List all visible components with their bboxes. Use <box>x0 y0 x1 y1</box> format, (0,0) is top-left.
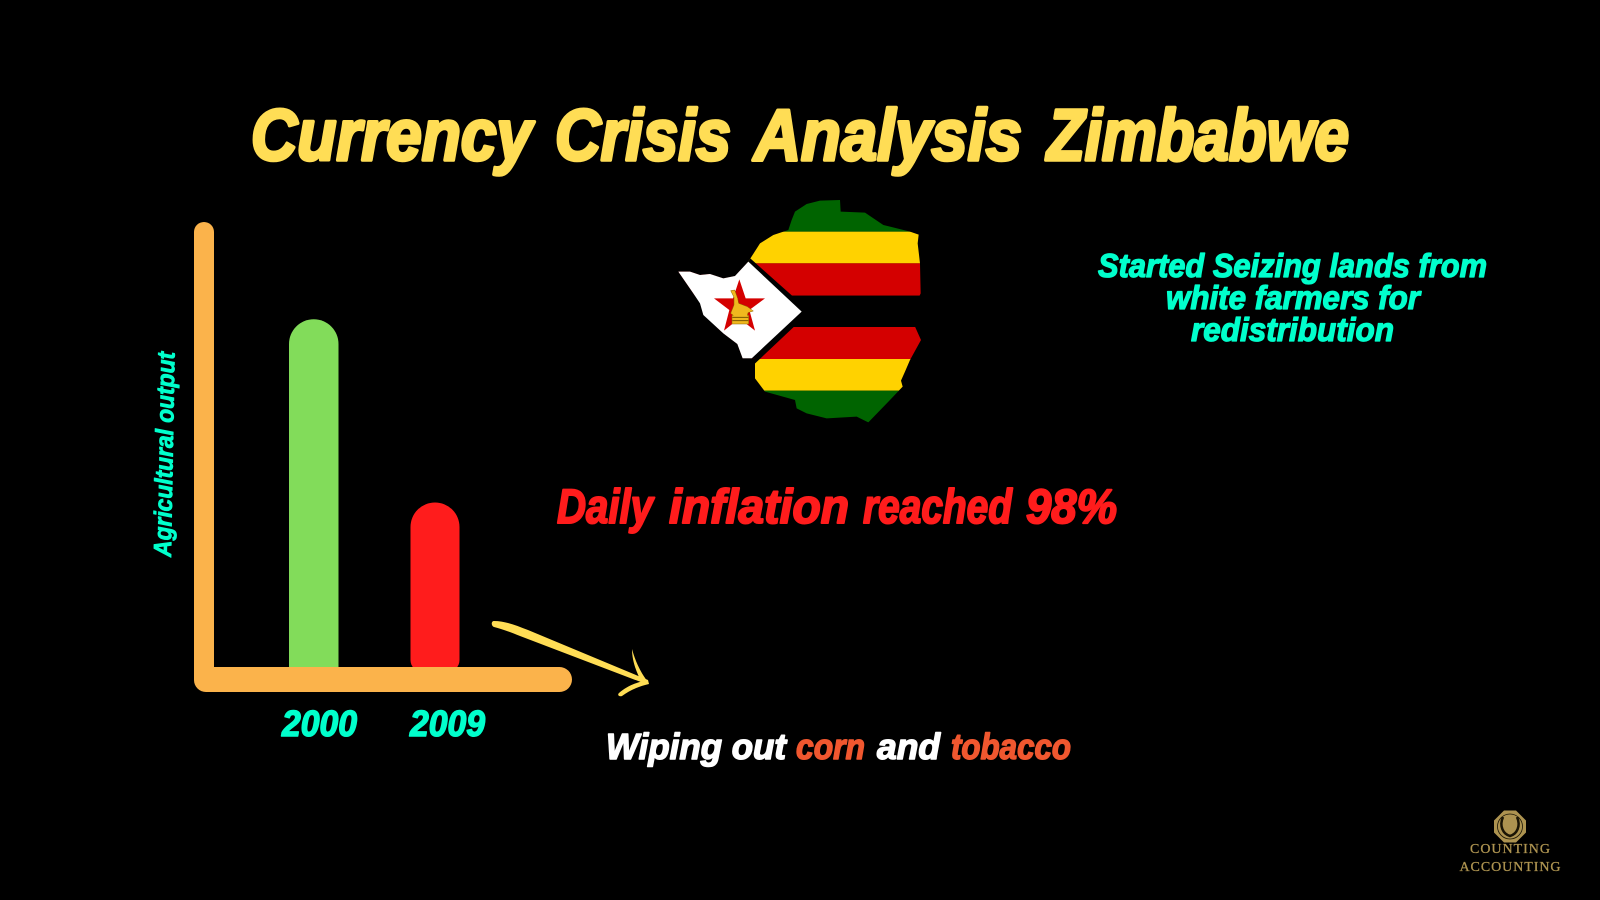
title: Analysis <box>752 96 1022 176</box>
text: land seizure note: white farmers for <box>1166 279 1422 316</box>
text: wiping out corn and tobacco: tobacco <box>951 726 1071 767</box>
text: daily inflation callout: Daily <box>557 481 655 534</box>
text: daily inflation callout: inflation <box>669 481 849 534</box>
y axis label: Agricultural output <box>149 350 181 558</box>
icon: Zimbabwe flag map <box>678 200 921 422</box>
logo wordmark <box>1460 842 1560 875</box>
text: daily inflation callout <box>557 481 1117 534</box>
chart axes <box>194 222 572 692</box>
text: daily inflation callout: reached <box>863 481 1013 534</box>
icon: laurel medallion <box>1494 810 1526 842</box>
logo: Counting Accounting <box>1460 810 1560 875</box>
bar chart: agricultural output <box>149 222 572 744</box>
bar: 2000 <box>289 319 338 675</box>
logo wordmark: ACCOUNTING <box>1460 860 1560 875</box>
title: Zimbabwe <box>1045 96 1349 176</box>
x label: 2000: 2000 <box>281 703 357 744</box>
bar: 2009 <box>410 502 460 672</box>
text: land seizure note <box>1098 247 1487 348</box>
title: Crisis <box>555 96 731 176</box>
text: daily inflation callout: 98% <box>1026 481 1117 534</box>
text: land seizure note: Started Seizing lands from <box>1098 247 1487 284</box>
title: Currency <box>251 96 536 176</box>
text: wiping out corn and tobacco: Wiping out <box>606 726 788 767</box>
text: wiping out corn and tobacco: and <box>877 726 941 767</box>
text: wiping out corn and tobacco: corn <box>796 726 865 767</box>
x label: 2009: 2009 <box>409 703 485 744</box>
text: land seizure note: redistribution <box>1191 311 1394 348</box>
text: wiping out corn and tobacco <box>606 726 1071 767</box>
arrow <box>492 621 649 696</box>
logo wordmark: COUNTING <box>1470 842 1550 857</box>
title <box>251 96 1349 176</box>
